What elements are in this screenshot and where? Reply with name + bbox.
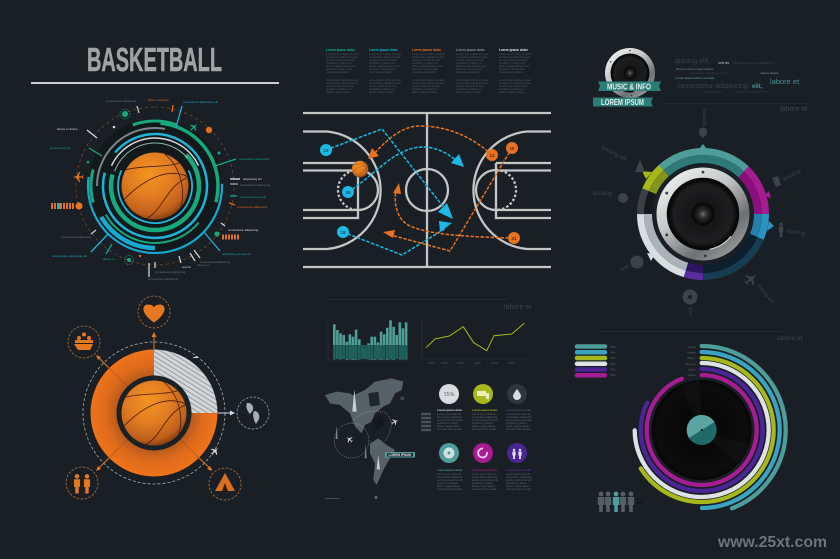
stat text blocks: incididunt ut labore <box>437 482 459 485</box>
stat text blocks: incididunt ut labore <box>472 422 494 425</box>
label: labore et: labore et <box>777 335 802 342</box>
column 1 text: incididunt ut labore et <box>326 87 352 91</box>
text cloud: labore et <box>780 106 807 113</box>
callout labels: consectetur adipisicing <box>239 157 270 161</box>
marker row lower right <box>214 231 240 237</box>
stat text blocks: Lorem ipsum dolor <box>472 408 498 412</box>
stat text blocks: Lorem ipsum dolor sit <box>437 413 461 416</box>
column 4 text: sed do eiusmod tempor <box>456 84 484 88</box>
column 5 text: dolore magna aliqua <box>499 90 524 94</box>
column 1 text: dolore magna aliqua enim <box>326 64 358 68</box>
legend values <box>610 345 696 377</box>
stat text blocks: sed do eiusmod tempor <box>472 419 498 422</box>
stat text blocks: Lorem ipsum dolor sit <box>437 473 461 476</box>
stat: 15 percent <box>439 384 459 404</box>
legend values: labore et <box>685 362 696 366</box>
column 2 text: ad minim veniam quis <box>369 67 396 71</box>
column 3 text: ad minim veniam quis <box>412 67 439 71</box>
column 2 text: nostrud exercitation <box>369 70 393 74</box>
column 4 text: Lorem ipsum dolor sit amet <box>456 52 489 56</box>
label: labore et: labore et <box>504 304 531 311</box>
player markers: 14 <box>489 153 495 158</box>
column 4 text: incididunt ut labore et <box>456 87 482 91</box>
legend values: aliqua <box>687 356 695 360</box>
column 2 text: Lorem ipsum dolor sit amet <box>369 78 402 82</box>
stat text blocks: Lorem ipsum dolor sit <box>472 473 496 476</box>
column 4 text: consectetur adipisicing elit <box>456 81 488 85</box>
stat text blocks: Lorem ipsum dolor <box>506 408 532 412</box>
stat text blocks: enim ad minim veniam <box>437 488 462 491</box>
panel: court text columns <box>326 48 532 94</box>
text cloud: labore et dolore magna aliqua <box>676 67 713 71</box>
callout labels: consectetur adipisicing <box>228 228 259 232</box>
text cloud <box>665 58 808 113</box>
stat text blocks: enim ad minim veniam <box>437 428 462 431</box>
stat text blocks: enim ad minim veniam <box>472 428 497 431</box>
title: BASKETBALL <box>87 41 222 78</box>
column 5 text: incididunt ut labore et <box>499 87 525 91</box>
column 2 text: consectetur adipisicing elit <box>369 55 401 59</box>
court lines <box>303 113 551 267</box>
line chart: 00000 <box>428 362 436 365</box>
stat text blocks: sed do eiusmod tempor <box>506 479 532 482</box>
text cloud: tempor incididunt ut labore <box>735 90 768 94</box>
icon: tent <box>209 468 241 500</box>
column 2 text: incididunt ut labore et <box>369 61 395 65</box>
line chart <box>422 320 528 365</box>
world map <box>325 378 404 499</box>
stat text blocks: Lorem ipsum dolor <box>437 408 463 412</box>
stat text blocks: incididunt ut labore <box>437 422 459 425</box>
column 3 text: Lorem ipsum dolor sit amet <box>412 52 445 56</box>
text cloud: consectetur adipisicing <box>677 83 748 90</box>
stat text blocks: incididunt ut labore <box>506 482 528 485</box>
panel: basketball court play diagram <box>303 113 551 267</box>
stat text blocks: sed do eiusmod tempor <box>506 419 532 422</box>
column 5 text: sed do eiusmod tempor <box>499 84 527 88</box>
column 3 text: dolore magna aliqua enim <box>412 64 444 68</box>
stat text blocks: enim ad minim veniam <box>506 428 531 431</box>
panel: orange donut chart <box>66 296 269 500</box>
column 3 text: consectetur adipisicing elit <box>412 81 444 85</box>
column 4 text: Lorem ipsum dolor sit amet <box>456 78 489 82</box>
callout labels: consectetur adipisicing <box>61 235 92 239</box>
column 1 text: ad minim veniam quis <box>326 67 353 71</box>
column 3 text: incididunt ut labore et <box>412 87 438 91</box>
icon: footprints <box>237 397 269 429</box>
stat text blocks: sed do eiusmod tempor <box>472 479 498 482</box>
column 1 text: Lorem ipsum dolor sit amet <box>326 52 359 56</box>
column 4 text: incididunt ut labore et <box>456 61 482 65</box>
column 5 text <box>499 48 532 94</box>
column 4 text: sed do eiusmod tempor <box>456 58 484 62</box>
line chart: 00000 <box>508 362 516 365</box>
legend values: 50% <box>610 373 616 377</box>
column 4 text <box>456 48 489 94</box>
stat text blocks: Lorem ipsum dolor <box>437 468 463 472</box>
dim surrounding icons and labels: ipsuing <box>786 228 805 237</box>
column 5 text: ad minim veniam quis <box>499 67 526 71</box>
dim surrounding icons and labels: ipsu <box>687 307 693 316</box>
column 2 text: sed do eiusmod tempor <box>369 84 397 88</box>
text cloud: labore et <box>770 77 800 86</box>
column 1 text: consectetur adipisicing elit <box>326 55 358 59</box>
callout labels: eiusmod tempor elit <box>240 195 266 199</box>
line chart: 00000 <box>457 362 465 365</box>
basketball <box>122 152 188 220</box>
cyan play routes <box>326 129 458 255</box>
orange play routes <box>372 126 514 251</box>
text cloud: sed do <box>718 61 729 65</box>
column 4 text: ad minim veniam quis <box>456 67 483 71</box>
stat text blocks: enim ad minim veniam <box>472 488 497 491</box>
player markers: 21 <box>511 236 517 241</box>
stat: refresh <box>473 443 493 463</box>
icon: heart <box>138 296 170 328</box>
map legend <box>325 414 431 499</box>
column 3 text: consectetur adipisicing elit <box>412 55 444 59</box>
stat text blocks: dolore magna aliqua <box>437 485 460 488</box>
dim surrounding icons and labels: ipsuing elit <box>755 283 775 305</box>
tick lines <box>87 105 240 277</box>
stat text blocks: incididunt ut labore <box>506 422 528 425</box>
callout labels: consectetur adipisicing elit <box>52 254 87 258</box>
route arrowheads <box>368 148 464 238</box>
panel: music and info badge <box>593 48 661 107</box>
column 1 text: Lorem ipsum dolor sit amet <box>326 78 359 82</box>
callout labels: labore et <box>103 257 115 261</box>
text cloud: ipsuing elit, <box>675 58 710 65</box>
ball hub <box>116 376 192 450</box>
legend values: magna <box>687 373 696 377</box>
stat text blocks: incididunt ut labore <box>472 482 494 485</box>
callout labels: consectetur adipisicing <box>240 183 271 187</box>
column 1 text: sed do eiusmod tempor <box>326 84 354 88</box>
dim surrounding icons and labels: ipsuing elit <box>600 144 628 163</box>
column 5 text: dolore magna aliqua enim <box>499 64 531 68</box>
column 2 text: dolore magna aliqua enim <box>369 64 401 68</box>
stat text blocks: consectetur adipisicing <box>506 416 532 419</box>
column 2 text: incididunt ut labore et <box>369 87 395 91</box>
title underline <box>31 82 279 84</box>
dim surrounding icons and labels: ipsuing <box>782 169 802 183</box>
column 1 text: dolore magna aliqua <box>326 90 351 94</box>
column 3 text: sed do eiusmod tempor <box>412 84 440 88</box>
callout labels: consectetur adipisicing <box>200 260 231 264</box>
stat: tap icon <box>473 384 493 404</box>
column 1 text <box>326 48 359 94</box>
text cloud: eiusmod tempor incididunt ut <box>733 61 774 65</box>
stat text blocks: sed do eiusmod tempor <box>437 479 463 482</box>
player markers: 10 <box>509 146 515 151</box>
stat text blocks: consectetur adipisicing <box>437 476 463 479</box>
column 3 text: dolore magna aliqua <box>412 90 437 94</box>
stat: water drop <box>507 384 527 404</box>
line chart: 00000 <box>441 362 449 365</box>
stat text blocks: dolore magna aliqua <box>437 425 460 428</box>
callout labels: labore et <box>197 263 209 267</box>
people pictogram <box>598 492 648 512</box>
stat text blocks: consectetur adipisicing <box>506 476 532 479</box>
column 3 text: Lorem ipsum dolor sit amet <box>412 78 445 82</box>
legend values: 65% <box>610 345 616 349</box>
ribbon: music and info: MUSIC & INFO <box>607 82 651 92</box>
column 2 text: consectetur adipisicing elit <box>369 81 401 85</box>
stat text blocks: dolore magna aliqua <box>472 485 495 488</box>
column 3 text: nostrud exercitation <box>412 70 436 74</box>
callout labels: labore et dolore <box>148 98 169 102</box>
ribbon: lorem ipsum: LOREM IPSUM <box>601 98 644 107</box>
callout labels: consectetur adipisicing <box>106 99 137 103</box>
column 4 text: nostrud exercitation <box>456 70 480 74</box>
legend values: 45% <box>610 350 616 354</box>
column 4 text: dolore magna aliqua enim <box>456 64 488 68</box>
stat text blocks: dolore magna aliqua <box>506 485 529 488</box>
column 5 text: nostrud exercitation <box>499 70 523 74</box>
concentric data rings <box>72 103 238 269</box>
watermark: www.25xt.com <box>717 534 827 551</box>
legend values: magna <box>687 350 696 354</box>
column 1 text: nostrud exercitation <box>326 70 350 74</box>
stat: disc <box>439 443 459 463</box>
callout labels: consectetur adipisicing <box>148 277 179 281</box>
ring pointers <box>642 144 774 261</box>
callout labels: sed do <box>182 265 191 269</box>
legend values: 35% <box>610 362 616 366</box>
stat: couple <box>507 443 527 463</box>
stat: 15 percent: 15% <box>443 392 455 398</box>
column 4 text: consectetur adipisicing elit <box>456 55 488 59</box>
dim surrounding icons and labels: ipsu <box>619 263 630 273</box>
column 4 text: dolore magna aliqua <box>456 90 481 94</box>
column 2 text: dolore magna aliqua <box>369 90 394 94</box>
player markers: 18 <box>340 230 346 235</box>
progress arcs <box>618 346 786 514</box>
panel: speaker ring chart <box>593 109 805 316</box>
text cloud: magna aliqua <box>760 71 778 75</box>
column 1 text: Lorem ipsum dolor <box>326 48 356 52</box>
map label <box>385 452 415 458</box>
callout labels: consectetur adipisicing <box>155 270 186 274</box>
column 4 text: Lorem ipsum dolor <box>456 48 486 52</box>
legend values: 55% <box>610 356 616 360</box>
dim surrounding icons and labels <box>593 109 805 316</box>
column 5 text: Lorem ipsum dolor <box>499 48 529 52</box>
legend values: dolore <box>688 345 696 349</box>
callout labels: labore et dolore <box>57 127 78 131</box>
large speaker <box>656 168 750 260</box>
orange marker row <box>51 202 83 210</box>
bar chart <box>328 320 412 360</box>
callout labels: consectetur adipisicing <box>237 205 268 209</box>
small speaker <box>605 48 655 98</box>
connector arrows <box>97 334 234 470</box>
callout labels: adipisicing elit sed do <box>222 252 251 256</box>
line chart: 00000 <box>474 362 482 365</box>
stat text blocks: consectetur adipisicing <box>472 416 498 419</box>
icon: couple <box>66 467 98 499</box>
column 2 text: Lorem ipsum dolor <box>369 48 399 52</box>
legend values: dolore <box>688 368 696 372</box>
panel: charts, map and stats <box>325 299 532 499</box>
small ring icons <box>72 109 220 264</box>
legend bars <box>577 346 605 375</box>
panel: radial basketball chart <box>50 98 271 281</box>
column 1 text: sed do eiusmod tempor <box>326 58 354 62</box>
column 3 text <box>412 48 445 94</box>
text cloud: elit, <box>752 84 763 90</box>
player markers: 26 <box>345 190 351 195</box>
legend values: 45% <box>610 368 616 372</box>
column 5 text: Lorem ipsum dolor sit amet <box>499 78 532 82</box>
stat text blocks: Lorem ipsum dolor sit <box>472 413 496 416</box>
column 2 text: Lorem ipsum dolor sit amet <box>369 52 402 56</box>
line chart: 00000 <box>491 362 499 365</box>
dim surrounding icons and labels: ipsuing <box>593 191 612 197</box>
stat text blocks: Lorem ipsum dolor <box>506 468 532 472</box>
column 5 text: incididunt ut labore et <box>499 61 525 65</box>
column 5 text: consectetur adipisicing elit <box>499 55 531 59</box>
donut sectors <box>90 350 218 476</box>
ring segments <box>615 126 791 302</box>
column 3 text: incididunt ut labore et <box>412 61 438 65</box>
stat text blocks <box>437 408 532 491</box>
callout labels: consectetur adipisicing elit <box>183 100 218 104</box>
stat text blocks: Lorem ipsum dolor <box>472 468 498 472</box>
column 1 text: incididunt ut labore et <box>326 61 352 65</box>
column 5 text: consectetur adipisicing elit <box>499 81 531 85</box>
stat text blocks: dolore magna aliqua <box>506 425 529 428</box>
player markers <box>320 142 520 244</box>
column 2 text: sed do eiusmod tempor <box>369 58 397 62</box>
callout labels: consectetur elit <box>50 146 70 150</box>
vinyl record <box>652 380 752 480</box>
column 1 text: consectetur adipisicing elit <box>326 81 358 85</box>
stat text blocks: dolore magna aliqua <box>472 425 495 428</box>
column 3 text: Lorem ipsum dolor <box>412 48 442 52</box>
stat text blocks: Lorem ipsum dolor sit <box>506 413 530 416</box>
column 3 text: sed do eiusmod tempor <box>412 58 440 62</box>
arrowheads <box>96 332 235 471</box>
map label: LOREM IPSUM <box>388 453 411 457</box>
dashed orbit <box>83 342 225 484</box>
column 2 text <box>369 48 402 94</box>
callout labels <box>50 98 271 281</box>
icon: family in boat <box>68 326 100 358</box>
text cloud: Lorem ipsum dolor sit amet <box>675 76 714 80</box>
dim surrounding icons and labels: ipsuing <box>702 109 708 126</box>
stat text blocks: sed do eiusmod tempor <box>437 419 463 422</box>
stat text blocks: consectetur adipisicing <box>472 476 498 479</box>
column 5 text: sed do eiusmod tempor <box>499 58 527 62</box>
text cloud: consectetur adipisicing sed do <box>690 71 728 75</box>
text cloud: sed do eiusmod <box>703 90 723 94</box>
panel: vinyl record chart <box>577 331 802 514</box>
player markers: 13 <box>323 148 329 153</box>
stat text blocks: Lorem ipsum dolor sit <box>506 473 530 476</box>
stat text blocks: consectetur adipisicing <box>437 416 463 419</box>
column 5 text: Lorem ipsum dolor sit amet <box>499 52 532 56</box>
stat text blocks: enim ad minim veniam <box>506 488 531 491</box>
ball on court <box>352 161 368 177</box>
callout labels: adipisicing elit <box>243 177 262 181</box>
